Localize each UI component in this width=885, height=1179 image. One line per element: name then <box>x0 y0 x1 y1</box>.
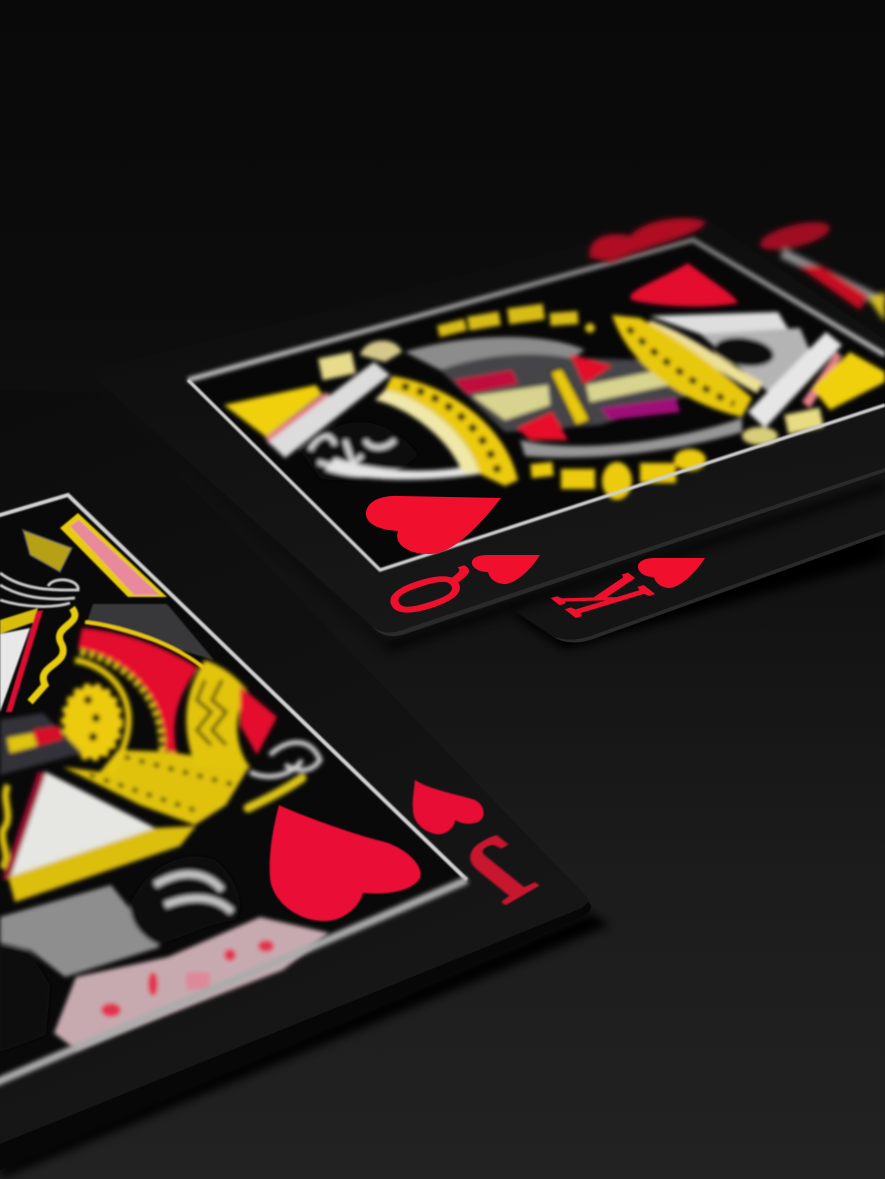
queen right cream band <box>648 326 760 388</box>
jack medallion ring <box>75 660 129 772</box>
king blurred heart <box>757 217 833 255</box>
jack grey hatch <box>87 604 214 660</box>
queen centre yellow stem <box>550 368 590 426</box>
jack art interior <box>0 495 467 1085</box>
queen left face <box>300 422 418 480</box>
queen card edge <box>372 468 885 636</box>
jack axe head <box>23 530 72 572</box>
queen right purple ribbon <box>600 398 680 420</box>
queen art bottom heart <box>366 496 501 554</box>
queen card body <box>94 215 885 633</box>
king corner heart <box>638 558 705 588</box>
queen right collar <box>612 315 752 417</box>
queen frame upper, blurred <box>188 240 885 380</box>
queen left collar dots <box>402 386 498 472</box>
queen left yellow panel <box>224 385 322 437</box>
king upper art fragment <box>757 217 885 322</box>
queen right sword <box>748 332 842 428</box>
card: jack of hearts (front left) <box>0 390 610 1179</box>
jack right medallion zigzags <box>197 680 226 745</box>
queen right face <box>712 334 776 370</box>
jack red arc <box>78 628 198 754</box>
card: king of hearts (back right) <box>510 217 885 650</box>
jack card body <box>0 390 590 1150</box>
jack art blurred main <box>0 628 329 1052</box>
king corner letter: K <box>523 566 679 626</box>
queen right ornaments <box>784 407 824 435</box>
queen centre-top red <box>570 354 612 384</box>
queen frame lower, sharp <box>188 380 885 570</box>
king corner index <box>523 558 705 626</box>
queen left purple ribbon <box>454 370 518 394</box>
jack yellow band <box>8 826 196 902</box>
jack scroll <box>0 573 78 606</box>
king red element <box>798 266 868 310</box>
jack pink crown band <box>54 917 329 1050</box>
jack right medallion <box>186 660 250 768</box>
queen left collar <box>385 376 518 486</box>
jack red fan <box>240 686 277 755</box>
queen art top heart <box>630 263 738 306</box>
king card edge <box>552 530 885 643</box>
queen lower grey band <box>520 418 742 458</box>
jack band red <box>33 726 63 746</box>
queen right collar dots <box>628 328 734 404</box>
jack yellow top line of shield <box>85 622 204 668</box>
queen left white curve <box>325 458 480 480</box>
jack band yellow <box>7 733 37 753</box>
king yellow element <box>868 292 885 322</box>
jack grey band <box>0 713 82 775</box>
queen right face surround <box>700 328 816 392</box>
jack card shadow <box>0 912 610 1179</box>
queen corner letter: Q <box>364 563 484 626</box>
queen top-corner heart, blurred <box>589 218 706 262</box>
queen card shadow <box>100 385 885 652</box>
jack medallion gear <box>64 686 120 758</box>
jack card lower edge <box>0 902 591 1170</box>
queen right ornament arc <box>742 427 778 445</box>
queen right pink edge <box>802 352 842 408</box>
king frame <box>782 253 885 303</box>
jack red diagonal <box>6 610 43 712</box>
jack art upper details <box>0 513 214 712</box>
queen blurred artwork <box>224 304 885 500</box>
queen top ornament row <box>437 304 595 337</box>
jack gold band <box>0 608 38 634</box>
jack corner letter: J <box>434 821 569 920</box>
queen left cream band <box>375 390 480 474</box>
jack left squiggle <box>2 785 8 868</box>
jack medallion gear holes <box>84 696 100 741</box>
jack grey scroll near heart <box>250 742 320 776</box>
queen bottom ornament row <box>530 449 706 500</box>
queen left ornament arc <box>360 341 402 362</box>
jack yellow squiggle <box>30 608 75 702</box>
jack medallion yellow teeth <box>80 652 162 752</box>
jack frame <box>0 495 467 1085</box>
queen art interior <box>188 240 885 570</box>
queen centre mid-grey fill <box>440 354 690 432</box>
jack white triangle <box>10 772 155 878</box>
jack crown pink spots <box>101 940 274 1017</box>
queen pink edge <box>265 392 331 445</box>
queen left sword <box>268 362 390 458</box>
jack corner heart <box>413 780 484 834</box>
queen centre-bottom red <box>517 412 568 440</box>
jack yellow flourish <box>248 778 302 808</box>
jack grey hatch lower <box>0 885 160 977</box>
queen right yellow panel <box>812 352 885 410</box>
king card shadow <box>512 490 885 650</box>
queen left ornament box <box>318 352 356 380</box>
jack face <box>130 856 240 943</box>
queen left cream stripes <box>472 385 550 420</box>
queen centre grey band <box>405 337 585 370</box>
queen right white band <box>650 312 790 334</box>
queen right cream stripes <box>586 370 670 402</box>
jack dark circle <box>0 945 50 1052</box>
queen corner heart <box>472 555 540 584</box>
jack stripe box <box>60 513 167 597</box>
jack white cape <box>0 628 30 712</box>
card: queen of hearts (centre) <box>94 215 885 652</box>
jack lower collar <box>63 750 250 825</box>
king card body <box>510 470 885 640</box>
jack art large heart <box>270 805 421 921</box>
